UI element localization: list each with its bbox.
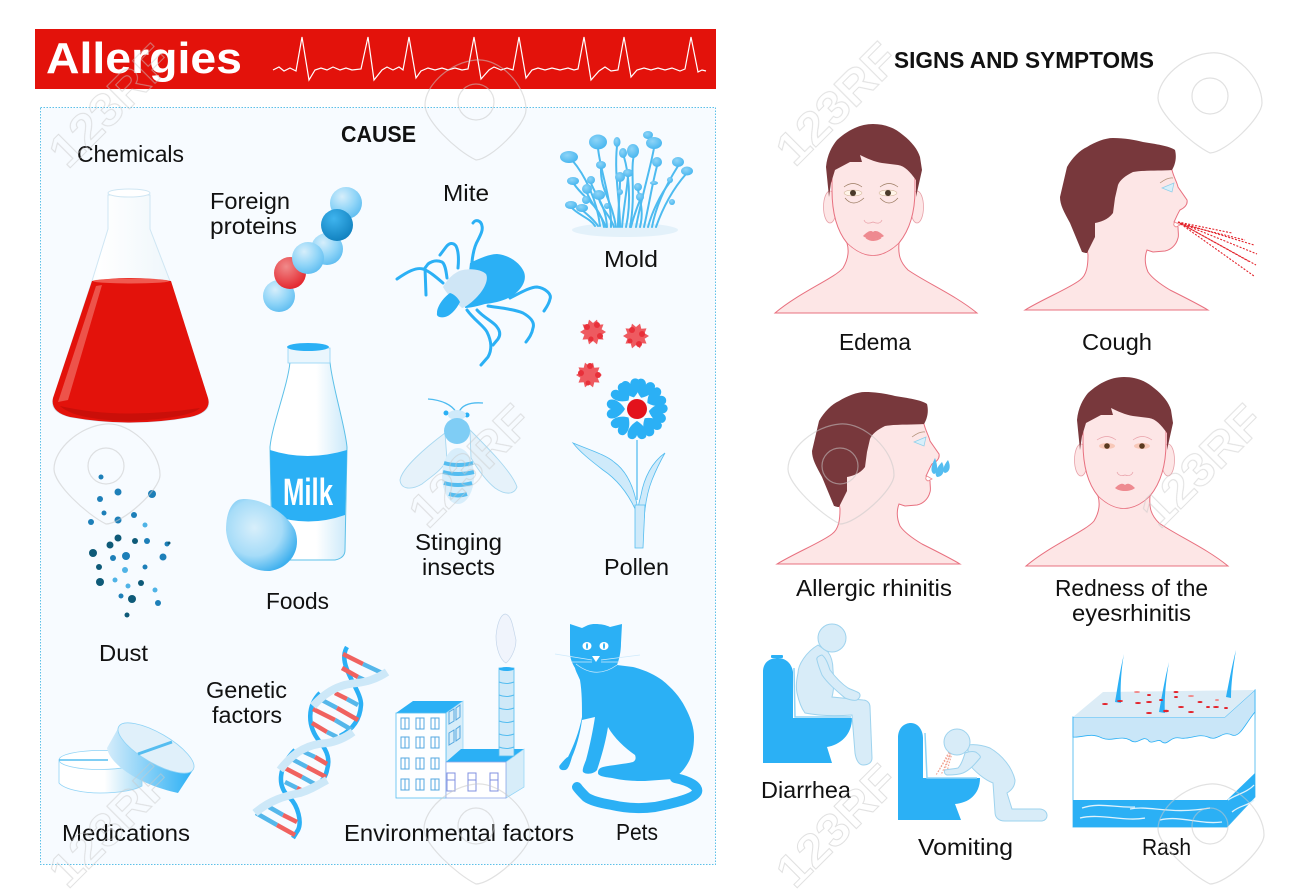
figure: cough — [1025, 138, 1257, 310]
panel: cause — [40, 108, 716, 864]
title: Allergies — [46, 34, 242, 83]
label: foreign proteins — [210, 188, 297, 239]
icon: nasal drip — [931, 458, 950, 477]
figure: vomiting — [898, 723, 1047, 821]
figure: rash skin section — [1073, 650, 1255, 827]
icon: ECG heartbeat line — [273, 37, 706, 80]
icon: mold — [560, 131, 693, 237]
watermark overlay: 123RF — [765, 32, 908, 175]
label: stinging insects: insects — [422, 554, 495, 580]
icon: flower petals — [607, 377, 668, 439]
icon: protein molecule — [263, 187, 362, 312]
figure: diarrhea — [763, 624, 872, 765]
icon: dna helix — [255, 647, 387, 838]
watermark overlay: 123RF — [1130, 394, 1273, 537]
label: dust: Dust — [99, 640, 149, 666]
figure: redness of the eyes — [1026, 377, 1228, 566]
watermark overlay: 123RF — [398, 394, 541, 537]
label: genetic factors: factors — [212, 702, 282, 728]
label: mite: Mite — [443, 180, 489, 206]
watermark overlay: 123RF — [38, 754, 181, 894]
heading: signs and symptoms: SIGNS AND SYMPTOMS — [894, 47, 1154, 73]
icon: cat — [555, 624, 697, 808]
icon: mite — [397, 221, 550, 365]
icon: milk bottle and egg — [226, 343, 347, 571]
label: allergic rhinitis: Allergic rhinitis — [796, 575, 952, 601]
label: chemicals: Chemicals — [77, 141, 184, 167]
figure: allergic rhinitis — [777, 392, 960, 564]
label: vomiting: Vomiting — [918, 834, 1013, 860]
watermark overlay: 123RF — [38, 34, 181, 177]
watermark overlay: 123RF — [765, 754, 908, 894]
label: foreign proteins: proteins — [210, 213, 297, 239]
header banner — [35, 29, 716, 89]
icon: pollen and flower — [573, 320, 668, 548]
label: stinging insects — [415, 529, 502, 580]
icon: red flask — [53, 189, 209, 422]
label: foreign proteins: Foreign — [210, 188, 290, 214]
label: mold: Mold — [604, 246, 658, 272]
icon: factory — [396, 614, 524, 798]
label: redness of the eyes: eyesrhinitis — [1072, 600, 1191, 626]
figure: edema — [775, 124, 977, 313]
label: genetic factors: Genetic — [206, 677, 287, 703]
label: edema: Edema — [839, 329, 911, 355]
label: medications: Medications — [62, 820, 190, 846]
text: milk label: Milk — [283, 472, 334, 514]
label: rash: Rash — [1142, 834, 1191, 860]
icon: dust particles — [88, 474, 170, 618]
label: pollen: Pollen — [604, 554, 669, 580]
label: stinging insects: Stinging — [415, 529, 502, 555]
label: cough: Cough — [1082, 329, 1152, 355]
label: pets: Pets — [616, 819, 658, 845]
heading: cause: CAUSE — [341, 121, 416, 147]
label: environmental factors: Environmental factors — [344, 820, 574, 846]
icon: pills — [59, 714, 201, 793]
icon: smoke — [496, 614, 516, 663]
label: redness of the eyes — [1055, 575, 1208, 626]
label: redness of the eyes: Redness of the — [1055, 575, 1208, 601]
icon: stinging insect — [400, 399, 517, 504]
label: genetic factors — [206, 677, 287, 728]
label: diarrhea: Diarrhea — [761, 777, 851, 803]
label: foods: Foods — [266, 588, 329, 614]
